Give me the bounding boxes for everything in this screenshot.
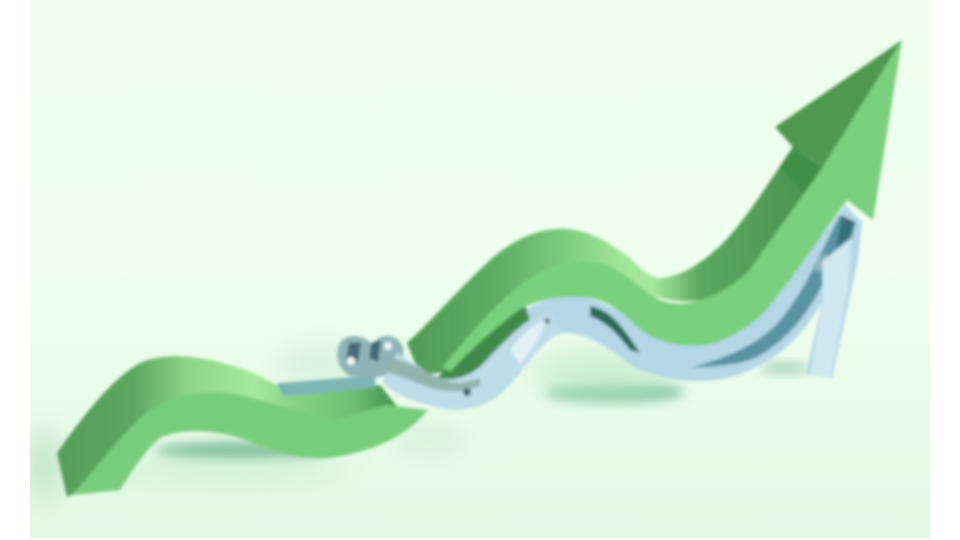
arrow head: dark face xyxy=(775,40,902,167)
side face: upper ribbon and arrow shaft xyxy=(407,147,825,375)
front face: lower left xyxy=(72,393,428,495)
shaft shadow below head xyxy=(780,147,823,195)
clip hardware and chrome rail, left section xyxy=(277,310,562,410)
front face: upper ribbon and arrow head xyxy=(443,40,902,372)
ground shadows xyxy=(29,345,810,501)
chrome rail, right section xyxy=(480,205,862,384)
arrow artwork xyxy=(57,40,902,497)
side face: lower left xyxy=(57,356,400,497)
dark crease under ribbon xyxy=(430,305,530,395)
